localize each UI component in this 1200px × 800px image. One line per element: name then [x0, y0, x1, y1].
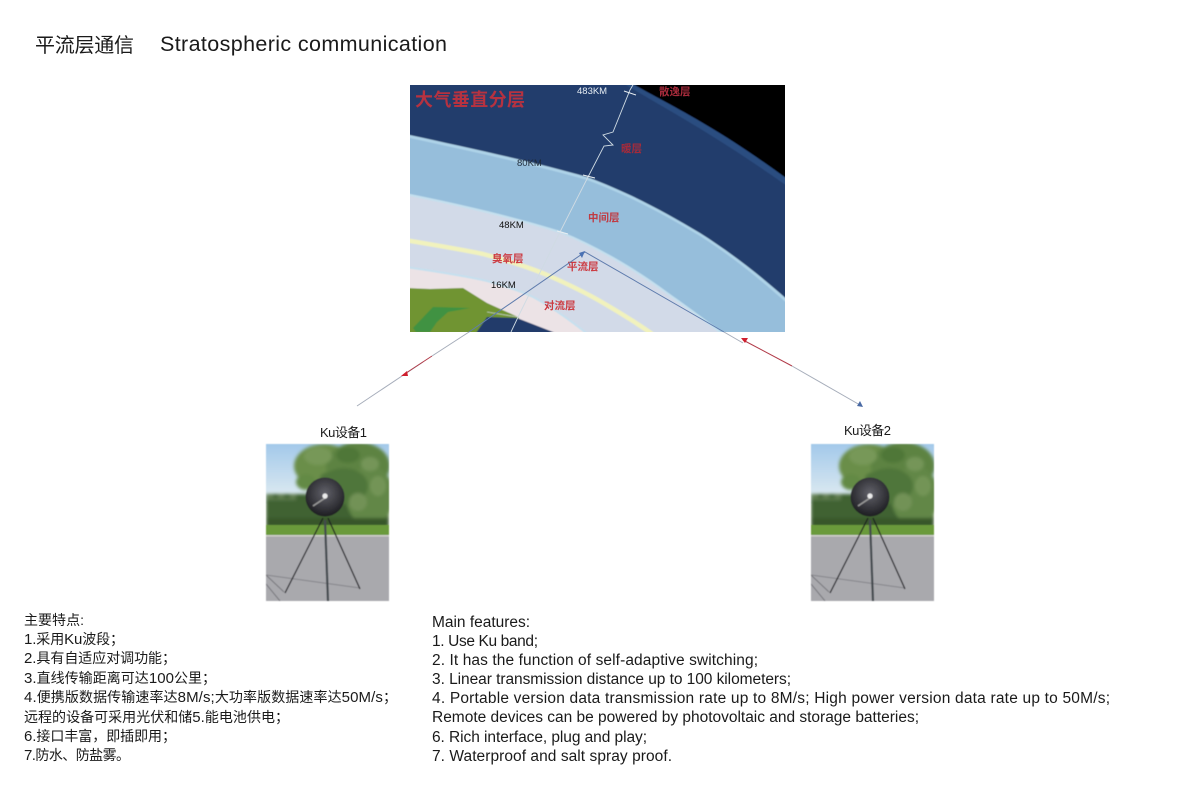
layer names: 平流层 — [567, 260, 598, 273]
altitude labels: 483KM — [577, 86, 607, 97]
Chinese feature list: 6.接口丰富，即插即用； — [24, 728, 176, 745]
Chinese feature list: 4.便携版数据传输速率达8M/s;大功率版数据速率达50M/s； — [24, 689, 397, 706]
English feature list: 1. Use Ku band; — [432, 633, 538, 650]
English feature list — [432, 614, 1110, 765]
device 2 photo — [811, 442, 939, 601]
atmosphere layers diagram — [405, 78, 790, 340]
altitude labels: 16KM — [491, 280, 516, 291]
layer names: 暖层 — [621, 142, 642, 155]
device 1 label: Ku设备1 — [320, 425, 367, 440]
English feature list: 7. Waterproof and salt spray proof. — [432, 748, 672, 765]
altitude labels: 48KM — [499, 220, 524, 231]
Chinese feature list: 主要特点: — [24, 612, 84, 628]
layer names: 散逸层 — [659, 85, 690, 98]
Chinese feature list: 2.具有自适应对调功能； — [24, 650, 176, 667]
English feature list: Remote devices can be powered by photovoltaic and storage batteries; — [432, 709, 919, 726]
altitude labels: 80KM — [517, 158, 542, 169]
layer names: 对流层 — [544, 299, 576, 312]
English feature list: 4. Portable version data transmission rate up to 8M/s; High power version data rate up to 50M/s; — [432, 690, 1110, 707]
title: Stratospheric communication — [160, 32, 447, 56]
English feature list: 6. Rich interface, plug and play; — [432, 729, 647, 746]
device 1 photo — [266, 442, 394, 601]
layer names — [492, 85, 690, 312]
altitude labels — [491, 86, 607, 291]
title: 平流层通信 — [35, 34, 134, 57]
atmosphere title: 大气垂直分层 — [415, 89, 525, 110]
English feature list: 2. It has the function of self-adaptive switching; — [432, 652, 758, 669]
device 2 label: Ku设备2 — [844, 423, 891, 438]
Chinese feature list: 1.采用Ku波段； — [24, 631, 124, 648]
Chinese feature list: 3.直线传输距离可达100公里； — [24, 670, 216, 687]
layer names: 中间层 — [588, 211, 620, 224]
English feature list: Main features: — [432, 614, 530, 631]
title — [35, 32, 447, 57]
signal arrows — [357, 251, 863, 407]
Chinese feature list: 7.防水、防盐雾。 — [24, 747, 130, 764]
layer names: 臭氧层 — [492, 252, 524, 265]
English feature list: 3. Linear transmission distance up to 100 kilometers; — [432, 671, 791, 688]
Chinese feature list: 远程的设备可采用光伏和储5.能电池供电； — [24, 709, 289, 726]
Chinese feature list — [24, 612, 397, 764]
